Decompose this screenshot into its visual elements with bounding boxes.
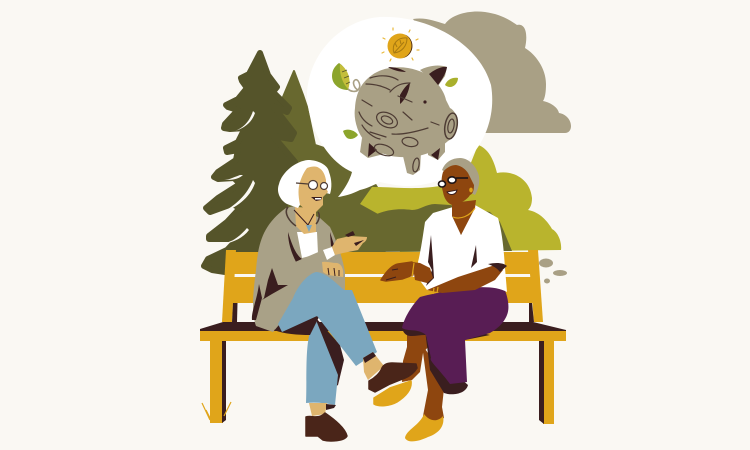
woman left: mouth (311, 197, 322, 201)
woman right: back leg (422, 345, 446, 423)
woman left: cardigan (253, 206, 345, 332)
coin with sparkle rays (382, 28, 419, 61)
bench: back slats (228, 252, 533, 274)
woman right (369, 158, 508, 441)
woman right: front leg (402, 330, 428, 382)
leaf: large (332, 63, 360, 91)
woman right: necklace (453, 208, 475, 218)
tree: branch gaps (220, 111, 255, 244)
woman left: lower ankle (309, 403, 327, 416)
woman left: lower leg (316, 318, 344, 390)
bench: back posts (222, 250, 236, 322)
woman right: earring (469, 188, 473, 192)
woman right: lower yellow shoe (405, 414, 443, 441)
thought bubble (307, 17, 492, 197)
grass tuft (202, 402, 231, 422)
woman left: cuff (323, 247, 335, 260)
woman right: bangles (433, 287, 438, 294)
woman right: blouse shadow (426, 235, 477, 286)
hill: dark olive band (360, 204, 512, 252)
woman left: forearm (295, 250, 332, 282)
woman left: upper shoe (369, 363, 417, 392)
woman left: lower shoe (306, 413, 347, 441)
bench: legs (210, 341, 223, 423)
woman right: hair (442, 158, 479, 195)
woman right: smile (447, 190, 457, 194)
woman left (252, 160, 384, 441)
woman right: blouse (418, 205, 507, 292)
woman right: upper yellow shoe (374, 381, 411, 406)
woman left: hair (278, 160, 331, 208)
pig: dark details (368, 67, 447, 160)
bench: seat (200, 322, 566, 332)
pig: ear (420, 66, 447, 86)
bench (200, 250, 566, 424)
leaf: small right (445, 78, 458, 87)
woman right: face (442, 165, 474, 205)
woman right: skirt (402, 287, 508, 384)
woman right: neck (452, 200, 476, 235)
woman left: pointing hand (332, 236, 367, 255)
woman left: collar (286, 207, 319, 226)
woman left: glasses (296, 180, 328, 190)
woman left: shirt (297, 232, 318, 258)
pig: wood grain (359, 76, 459, 172)
cloud (413, 12, 571, 133)
woman right: glasses (438, 177, 468, 187)
woman left: jeans thigh (274, 315, 320, 335)
woman right: far arm (412, 262, 433, 283)
tree: front fir (204, 53, 295, 272)
woman right: near arm (427, 265, 503, 293)
pig: legs (360, 136, 445, 175)
woman left: neck (295, 207, 316, 234)
piggy bank (355, 66, 459, 175)
woman left: face (298, 166, 328, 212)
woman right: open hand (381, 262, 413, 281)
tree: back fir reaching behind the bubble (262, 71, 385, 255)
pig: body (355, 67, 458, 157)
bush: lime foliage (360, 145, 561, 252)
woman left: cardigan shadow (252, 232, 335, 320)
leaf: small bottom (343, 130, 358, 139)
woman left: resting hand (322, 262, 343, 277)
woman right: skirt hem shadow (402, 328, 490, 394)
woman left: necklace (294, 210, 314, 225)
woman left: upper ankle (363, 352, 384, 380)
pebbles (539, 258, 567, 284)
